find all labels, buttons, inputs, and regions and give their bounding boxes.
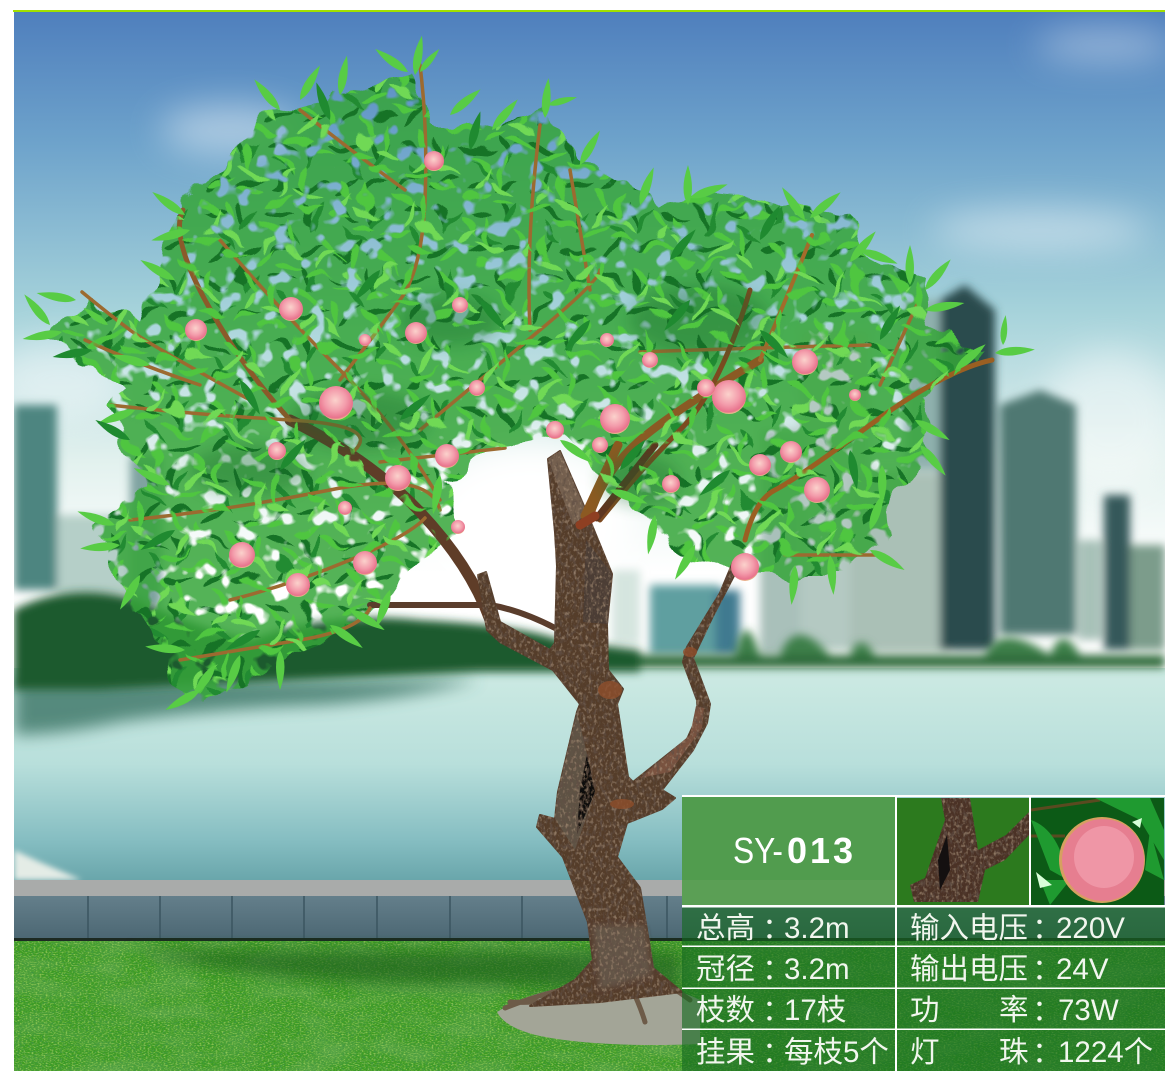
spec: total height: 总高 <box>696 912 755 945</box>
spec: crown diameter: ： <box>755 948 784 990</box>
spec: power: 率 <box>999 994 1029 1027</box>
spec: crown diameter: 冠径 <box>696 953 755 986</box>
top lime border line <box>13 10 1165 12</box>
lower trunk grey band <box>592 925 652 990</box>
spec: fruit <box>696 1031 889 1073</box>
spec: output voltage: 输出电压 <box>910 953 1028 986</box>
fork branch <box>548 451 587 525</box>
table grid lines <box>682 795 1165 1071</box>
grass lawn <box>14 941 1165 1071</box>
spec: input voltage: 220V <box>1056 912 1125 945</box>
model number: SY- <box>733 830 783 871</box>
orange fork branches <box>580 445 655 525</box>
peach detail cell <box>1031 798 1164 905</box>
clouds <box>0 31 1174 490</box>
edge leaves bright <box>21 35 1035 714</box>
spec: fruit: ： <box>755 1031 784 1073</box>
spec: LED beads: 珠 <box>999 1036 1029 1069</box>
spec: power: 功 <box>910 994 940 1027</box>
root mound <box>497 984 700 1045</box>
foliage front layer <box>40 70 990 705</box>
sky <box>14 12 1165 542</box>
peach fruits <box>185 151 861 597</box>
spec: input voltage: 输入电压 <box>910 912 1028 945</box>
spec: crown diameter: 3.2m <box>784 953 850 986</box>
spec: branches: ： <box>755 989 784 1031</box>
trunk <box>478 451 737 1006</box>
spec: total height <box>696 907 850 949</box>
branches <box>82 65 992 660</box>
foliage back layer <box>40 70 990 705</box>
spec: branches: 枝数 <box>696 994 755 1027</box>
spec: crown diameter <box>696 948 850 990</box>
roots <box>505 975 690 1022</box>
water <box>14 668 1165 882</box>
stone wall cap <box>14 880 1165 896</box>
main trunk and right limb <box>478 451 737 1006</box>
spec: input voltage <box>910 907 1125 949</box>
bark knots <box>598 647 697 809</box>
distant city buildings <box>14 285 1165 655</box>
spec: LED beads: ： <box>1025 1031 1054 1073</box>
dark shaded foliage clumps <box>190 285 770 505</box>
spec: fruit: 每枝5个 <box>784 1036 889 1069</box>
tree shadow on grass <box>130 950 682 1000</box>
model number cell <box>682 796 895 905</box>
tree reflection in water <box>14 680 480 735</box>
spec: output voltage: 24V <box>1056 953 1109 986</box>
spec: total height: ： <box>755 907 784 949</box>
stone wall face with joints <box>14 896 1165 941</box>
model number <box>733 830 853 871</box>
spec: power: 73W <box>1058 994 1119 1027</box>
back stem <box>583 540 612 624</box>
limb highlight <box>640 706 704 778</box>
spec: LED beads <box>910 1031 1153 1073</box>
spec panel <box>682 795 1165 1073</box>
spec rows translucent backing <box>682 905 1165 1071</box>
trunk cavity <box>577 754 595 834</box>
trunk detail cell <box>897 798 1029 905</box>
spec: power <box>910 989 1119 1031</box>
spec: output voltage: ： <box>1025 948 1054 990</box>
model number: 013 <box>787 830 853 871</box>
spec: LED beads: 1224个 <box>1058 1036 1153 1069</box>
spec: LED beads: 灯 <box>910 1036 940 1069</box>
spec: branches: 17枝 <box>784 994 846 1027</box>
spec: total height: 3.2m <box>784 912 850 945</box>
edge leaves dark <box>52 81 903 654</box>
spec: input voltage: ： <box>1025 907 1054 949</box>
small white flower at water edge <box>14 850 82 880</box>
spec: fruit: 挂果 <box>696 1036 755 1069</box>
grey back trunk <box>555 712 595 850</box>
bright haze behind tree <box>426 426 636 542</box>
spec: power: ： <box>1025 989 1054 1031</box>
far shore trees <box>14 592 1165 690</box>
spec: branches <box>696 989 846 1031</box>
spec: output voltage <box>910 948 1109 990</box>
